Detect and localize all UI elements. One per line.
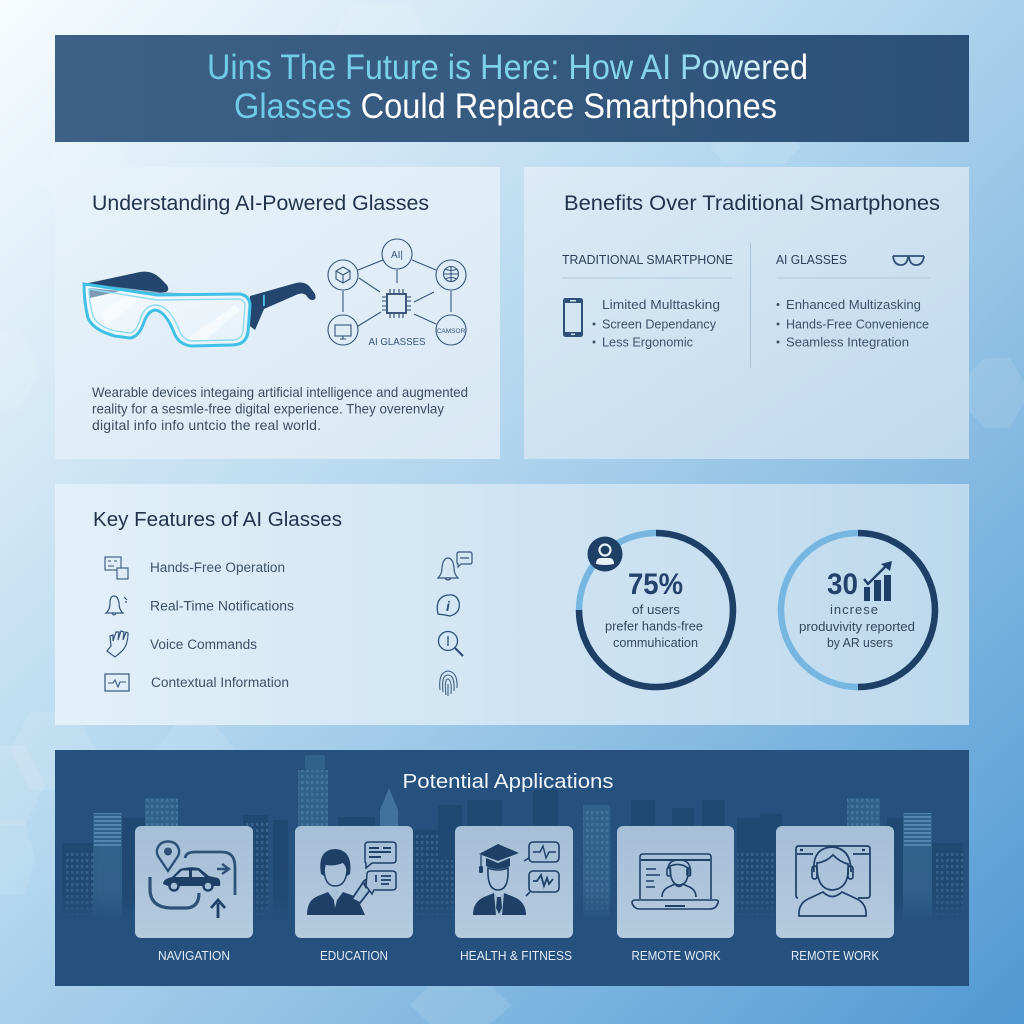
application: navigation: NAVIGATION <box>158 949 230 963</box>
node: camera: CAMSOR <box>437 328 466 335</box>
application: health and fitness: HEALTH & FITNESS <box>460 949 572 963</box>
city skyline backdrop <box>55 755 969 922</box>
panel: benefits over traditional smartphones <box>524 167 969 459</box>
stat ring: 30 percent <box>781 533 935 687</box>
heading: understanding: Understanding AI-Powered Glasses <box>92 192 429 215</box>
node: chip <box>382 289 411 318</box>
feature: real-time notifications: Real-Time Notifications <box>150 598 294 614</box>
title banner <box>55 35 969 142</box>
icon: glasses outline <box>893 256 924 265</box>
diagram: AI glasses network <box>328 239 466 348</box>
application: remote work laptop: REMOTE WORK <box>632 949 721 963</box>
description text: Wearable devices integaing artificial intelligence and augmented <box>92 384 468 400</box>
icon: rising chart <box>864 561 892 601</box>
illustration: glasses <box>84 272 316 346</box>
column: traditional smartphone: TRADITIONAL SMARTPHONE <box>562 253 733 267</box>
icon: smartphone <box>563 298 583 337</box>
application: education <box>295 826 413 963</box>
title line 2: Glasses Could Replace Smartphones <box>234 87 777 126</box>
column: AI glasses <box>776 253 930 350</box>
feature: voice commands <box>107 631 257 657</box>
list: glasses benefits: Seamless Integration <box>786 334 909 350</box>
description text <box>92 384 468 433</box>
feature: contextual information <box>105 674 289 691</box>
description text: reality for a sesmle-free digital experience. They overenvlay <box>92 400 444 416</box>
icon: user badge <box>588 536 622 572</box>
icon: person with headset over browser window <box>796 846 870 916</box>
application: health and fitness <box>455 826 573 963</box>
stat ring: 30 percent: increse <box>830 602 878 617</box>
stat ring: 75 percent: 75% <box>628 568 683 601</box>
panel: understanding AI-powered glasses <box>55 167 500 459</box>
icon: magnifier <box>438 632 463 656</box>
icon: info bubble: i <box>446 598 451 614</box>
node: brain <box>436 260 466 290</box>
stat ring: 30 percent: by AR users <box>827 635 893 650</box>
icon: teacher with speech bubbles <box>307 842 396 915</box>
node: cube <box>328 260 358 290</box>
application: navigation <box>135 826 253 963</box>
node: monitor <box>328 315 358 345</box>
stat ring: 30 percent: produvivity reported <box>799 619 915 634</box>
list: smartphone drawbacks: Limited Multtasking <box>602 297 720 312</box>
stat ring: 30 percent: 30 <box>827 568 858 601</box>
application: remote work headset: REMOTE WORK <box>791 949 880 963</box>
feature: voice commands: Voice Commands <box>150 637 257 652</box>
list: glasses benefits: Enhanced Multizasking <box>786 297 921 312</box>
panel: potential applications <box>55 750 969 986</box>
icon: graduate with health bubbles <box>473 842 559 915</box>
icon: bell with message <box>438 552 472 580</box>
list: glasses benefits: Hands-Free Convenience <box>786 316 929 332</box>
column divider <box>750 243 751 368</box>
panel: key features <box>55 484 969 725</box>
label: AI glasses: AI GLASSES <box>368 337 426 348</box>
list: smartphone drawbacks: Less Ergonomic <box>602 334 693 350</box>
stat ring: 75 percent: commuhication <box>613 635 698 650</box>
application: education: EDUCATION <box>320 949 388 963</box>
node: AI: AI| <box>391 250 403 261</box>
stat ring: 75 percent: prefer hands-free <box>605 618 703 634</box>
feature: real-time notifications <box>106 596 294 615</box>
heading: potential applications: Potential Applications <box>402 771 614 793</box>
application: remote work laptop <box>617 826 734 963</box>
icon: info bubble <box>437 595 459 616</box>
list: smartphone drawbacks: Screen Dependancy <box>602 316 716 332</box>
column: traditional smartphone <box>562 253 733 350</box>
description text: digital info info untcio the real world. <box>92 417 321 433</box>
list: glasses benefits <box>776 297 929 350</box>
list: smartphone drawbacks <box>592 297 720 350</box>
title line 1: Uins The Future is Here: How AI Powered <box>207 48 808 87</box>
feature: hands-free operation <box>105 557 285 579</box>
application: remote work headset <box>776 826 894 963</box>
icon: car and route <box>150 842 235 918</box>
feature: hands-free operation: Hands-Free Operation <box>150 560 285 575</box>
feature: contextual information: Contextual Information <box>151 675 289 690</box>
stat ring: 75 percent <box>579 533 733 687</box>
heading: benefits: Benefits Over Traditional Smartphones <box>564 192 940 215</box>
icon: laptop video call <box>632 854 718 909</box>
stat ring: 75 percent: of users <box>632 602 681 617</box>
icon: fingerprint <box>440 671 457 696</box>
heading: key features: Key Features of AI Glasses <box>93 509 342 531</box>
column: AI glasses: AI GLASSES <box>776 253 847 267</box>
